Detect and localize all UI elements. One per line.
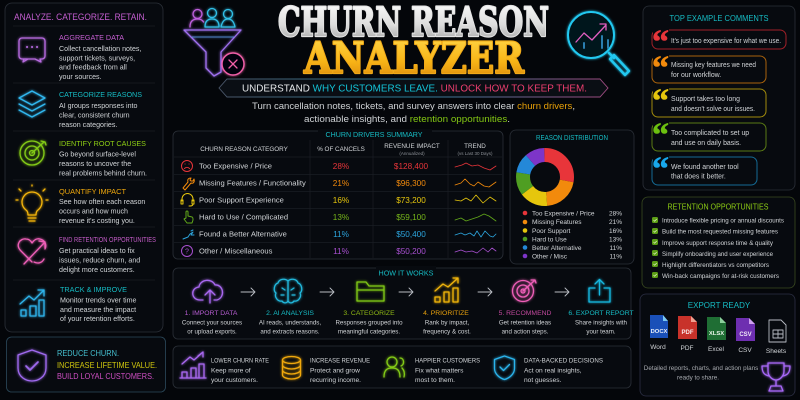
row: better alternative: [183, 230, 496, 239]
item: identify root causes: real problems behind churn.: [59, 170, 147, 178]
benefit lower churn rate: your customers.: [211, 377, 258, 384]
item: aggregate data: and feedback from all: [59, 64, 127, 72]
comment 2: “: [652, 50, 669, 87]
table header: [200, 143, 493, 156]
file icon docx: [650, 315, 668, 351]
benefit lower churn rate: [180, 352, 270, 384]
row: better alternative: Found a Better Alternative: [199, 230, 287, 238]
table header: % OF CANCELS: [317, 146, 365, 153]
comment 1: It's just too expensive for what we use.: [671, 38, 781, 45]
step 1 import data: [182, 280, 242, 336]
item: quantify impact: QUANTIFY IMPACT: [59, 187, 126, 196]
subtitle text: [252, 101, 575, 124]
row: other: ?: [185, 248, 189, 256]
file icon csv: CSV: [739, 332, 752, 338]
comment 4: “: [652, 117, 669, 154]
benefit happier customers: most to them.: [415, 377, 455, 384]
step 6 export report: Share insights with: [575, 320, 628, 326]
item: quantify impact: See how often each reason: [59, 198, 145, 206]
benefit happier customers: [384, 357, 481, 384]
benefit data-backed decisions: [494, 356, 604, 384]
row: too expensive: [182, 160, 496, 172]
step 3 categorize: 3. CATEGORIZE: [343, 310, 395, 317]
benefit increase revenue: Protect and grow: [310, 368, 360, 374]
row: poor support: 16%: [333, 196, 349, 205]
benefit increase revenue: [282, 356, 371, 384]
comment 5: [652, 151, 757, 188]
item: track and improve: TRACK & IMPROVE: [60, 285, 127, 294]
export caption: [644, 365, 758, 382]
donut legend: Hard to Use: [532, 236, 567, 243]
donut legend: 13%: [609, 236, 622, 243]
retention checklist: Build the most requested missing features: [662, 228, 779, 236]
icon: target: [20, 141, 46, 165]
item: categorize reasons: CATEGORIZE REASONS: [59, 90, 142, 99]
step 3 categorize: [335, 282, 403, 336]
donut legend: Better Alternative: [532, 245, 582, 252]
row: too expensive: Too Expensive / Price: [199, 162, 272, 170]
icon: heart with arrow: [18, 239, 46, 264]
item: quantify impact: [59, 187, 145, 225]
step 5 recommend: Get retention ideas: [499, 320, 551, 326]
donut legend: 28%: [609, 210, 622, 218]
callout text: INCREASE LIFETIME VALUE.: [57, 360, 157, 370]
file icon sheets: [766, 320, 787, 355]
comment 3: “: [652, 83, 669, 120]
benefit data-backed decisions: Act on real insights,: [524, 368, 582, 374]
panel: analyze categorize retain: [5, 3, 163, 332]
item: find retention opportunities: delight more customers.: [59, 266, 135, 274]
step 5 recommend: and action steps.: [502, 328, 549, 336]
step 1 import data: or upload exports.: [187, 328, 237, 336]
step 5 recommend: 5. RECOMMEND: [499, 310, 552, 317]
export caption: Detailed reports, charts, and action plans: [644, 365, 758, 372]
banner: UNDERSTAND WHY CUSTOMERS LEAVE. UNLOCK HOW TO KEEP THEM.: [242, 84, 587, 94]
icon: light bulb: [16, 185, 48, 221]
row: missing features: [183, 178, 496, 190]
table header: (vs Last 30 Days): [457, 151, 493, 156]
comment 1: [652, 24, 786, 61]
subtitle text: Turn cancellation notes, tickets, and survey answers into clear churn drivers ,: [252, 101, 575, 111]
step 6 export report: [568, 280, 634, 336]
row: missing features: Missing Features / Functionality: [199, 178, 306, 188]
callout text: [57, 348, 157, 381]
retention checklist: Introduce flexible pricing or annual discounts: [662, 218, 785, 224]
item: aggregate data: support tickets, surveys,: [59, 54, 135, 62]
icon: layers: [19, 91, 45, 117]
item: identify root causes: Go beyond surface-level: [59, 150, 136, 158]
title: [278, 0, 549, 84]
retention checklist: Improve support response time & quality: [662, 240, 774, 247]
comment 3: and doesn't solve our issues.: [671, 106, 755, 113]
comment 2: Missing key features we need: [671, 62, 756, 69]
comments heading: TOP EXAMPLE COMMENTS: [670, 14, 768, 23]
banner: [219, 79, 608, 97]
file icon sheets: Sheets: [766, 348, 787, 355]
row: too expensive: 28%: [333, 162, 349, 171]
file icon xlsx: [707, 317, 726, 353]
comment 3: [652, 83, 766, 120]
title: CHURN REASON: [278, 0, 549, 46]
item: categorize reasons: [59, 90, 142, 129]
benefit increase revenue: recurring income.: [310, 377, 361, 384]
benefit data-backed decisions: not guesses.: [524, 377, 562, 384]
item: track and improve: [60, 285, 137, 323]
panel: benefits bar: [173, 346, 631, 388]
distribution heading: REASON DISTRIBUTION: [536, 133, 608, 142]
item: track and improve: of your retention efforts.: [60, 315, 135, 323]
comment 2: for our workflow.: [671, 72, 721, 79]
item: track and improve: Monitor trends over time: [60, 296, 137, 304]
icon: growth chart: [20, 290, 44, 316]
step 6 export report: 6. EXPORT REPORT: [568, 310, 634, 317]
table header: CHURN REASON CATEGORY: [200, 146, 289, 153]
step 3 categorize: Responses grouped into: [335, 320, 403, 326]
comment 5: We found another tool: [671, 164, 739, 171]
step 6 export report: your team.: [586, 328, 616, 336]
row: better alternative: $50,400: [396, 230, 426, 239]
icon: shield with check: [18, 350, 46, 381]
panel: retention opportunities: [642, 197, 795, 288]
panel: churn drivers table: [173, 129, 503, 259]
panel: top example comments: [643, 6, 795, 190]
donut legend: Other / Misc: [532, 253, 568, 260]
icon: funnel with people: [184, 8, 244, 76]
step 2 ai analysis: [259, 279, 321, 336]
comment 4: and use on daily basis.: [671, 140, 741, 147]
retention checklist: [652, 217, 785, 280]
file icon xlsx: Excel: [708, 346, 724, 353]
file icon docx: Word: [650, 344, 666, 351]
item: aggregate data: Collect cancellation notes,: [59, 45, 141, 53]
step 4 prioritize: [423, 278, 471, 336]
callout text: REDUCE CHURN.: [57, 348, 119, 358]
comment 1: “: [652, 24, 669, 61]
row: poor support: Poor Support Experience: [199, 196, 284, 204]
donut legend: Too Expensive / Price: [532, 210, 595, 218]
donut legend: Poor Support: [532, 228, 570, 235]
row: poor support: [181, 194, 496, 206]
table header: TREND: [464, 143, 486, 150]
item: identify root causes: reasons to uncover the: [59, 160, 131, 168]
item: track and improve: and measure the impact: [60, 306, 136, 314]
icon: chat bubble: [19, 38, 45, 62]
item: find retention opportunities: [59, 237, 156, 274]
row: hard to use: [184, 211, 496, 223]
retention heading: RETENTION OPPORTUNITIES: [668, 202, 768, 212]
row: other: Other / Miscellaneous: [199, 246, 273, 256]
step 3 categorize: meaningful categories.: [338, 328, 400, 336]
item: categorize reasons: clear, consistent churn: [59, 112, 130, 120]
row: hard to use: $59,100: [396, 213, 426, 222]
arrows between steps: [241, 288, 569, 296]
item: categorize reasons: AI groups responses into: [59, 102, 138, 110]
comment 5: that does it better.: [671, 174, 726, 180]
row: hard to use: Hard to Use / Complicated: [199, 212, 288, 222]
item: aggregate data: AGGREGATE DATA: [59, 33, 125, 42]
file icon pdf: PDF: [682, 330, 694, 336]
benefit data-backed decisions: DATA-BACKED DECISIONS: [524, 358, 604, 364]
item: identify root causes: [59, 139, 147, 178]
file icon pdf: [678, 316, 697, 352]
subtitle text: actionable insights, and retention opportunities .: [304, 114, 510, 124]
panel: how it works: [173, 266, 634, 339]
callout text: BUILD LOYAL CUSTOMERS.: [57, 371, 154, 381]
donut chart: [523, 155, 567, 199]
title: ANALYZER: [303, 34, 524, 84]
table title: CHURN DRIVERS SUMMARY: [326, 130, 423, 139]
item: quantify impact: revenue it's costing you.: [59, 217, 135, 225]
export caption: ready to share.: [677, 374, 719, 382]
comment 4: [652, 117, 766, 154]
comment 5: “: [652, 151, 669, 188]
file icon csv: CSV: [738, 347, 752, 354]
file icon docx: DOCX: [651, 329, 668, 335]
donut legend: 16%: [609, 228, 622, 235]
item: identify root causes: IDENTIFY ROOT CAUSES: [59, 139, 146, 148]
row: better alternative: 11%: [333, 230, 349, 239]
row: other: 11%: [333, 247, 349, 256]
icon: magnifying glass with chart: [568, 12, 629, 75]
step 2 ai analysis: and extracts reasons.: [260, 328, 320, 336]
benefit happier customers: HAPPIER CUSTOMERS: [415, 358, 481, 364]
table header: (Annualized): [399, 151, 425, 156]
icon: trophy: [762, 363, 790, 391]
panel: reduce churn callout: [6, 337, 166, 392]
panel: reason distribution: [510, 130, 634, 264]
file icon xlsx: XLSX: [709, 331, 724, 337]
item: find retention opportunities: Get practical ideas to fix: [59, 247, 135, 255]
retention checklist: Win-back campaigns for at-risk customers: [662, 273, 780, 280]
step 1 import data: 1. IMPORT DATA: [185, 310, 238, 317]
donut legend: 11%: [609, 245, 622, 252]
step 4 prioritize: Rank by impact,: [425, 320, 469, 326]
item: aggregate data: your sources.: [59, 73, 102, 81]
donut legend: [523, 210, 622, 260]
step 1 import data: Connect your sources: [182, 320, 242, 326]
item: find retention opportunities: issues, reduce churn, and: [59, 256, 140, 264]
donut legend: Missing Features: [532, 219, 582, 226]
comment 4: Too complicated to set up: [671, 130, 749, 137]
step 5 recommend: [499, 280, 552, 336]
row: too expensive: $128,400: [394, 162, 429, 171]
retention checklist: Simplify onboarding and user experience: [662, 251, 773, 258]
panel heading: ANALYZE. CATEGORIZE. RETAIN.: [14, 12, 147, 23]
benefit lower churn rate: Keep more of: [211, 368, 251, 374]
row: hard to use: 13%: [333, 213, 349, 222]
how it works heading: HOW IT WORKS: [379, 268, 434, 278]
comment 2: [652, 50, 766, 87]
benefit increase revenue: INCREASE REVENUE: [310, 358, 371, 364]
file icon pdf: PDF: [680, 345, 694, 352]
row: other: $50,200: [396, 247, 426, 256]
file icon csv: [736, 318, 755, 354]
row: other: [182, 246, 496, 256]
item: aggregate data: [59, 33, 141, 81]
donut legend: 21%: [609, 219, 622, 226]
benefit happier customers: Fix what matters: [415, 368, 464, 374]
comment 3: Support takes too long: [671, 96, 740, 103]
item: find retention opportunities: FIND RETENTION OPPORTUNITIES: [59, 237, 156, 244]
donut legend: 11%: [609, 253, 622, 260]
step 2 ai analysis: 2. AI ANALYSIS: [266, 310, 314, 317]
export heading: EXPORT READY: [688, 301, 751, 310]
row: poor support: $73,200: [396, 196, 426, 205]
table header: REVENUE IMPACT: [384, 143, 440, 150]
item: quantify impact: occurs and how much: [59, 208, 128, 216]
panel: export ready: [640, 294, 795, 396]
step 4 prioritize: 4. PRIORITIZE: [423, 310, 469, 317]
step 4 prioritize: frequency & cost.: [423, 328, 471, 336]
row: missing features: 21%: [333, 179, 349, 188]
benefit lower churn rate: LOWER CHURN RATE: [211, 358, 270, 364]
item: categorize reasons: reason categories.: [59, 121, 117, 129]
step 2 ai analysis: AI reads, understands,: [259, 320, 321, 326]
row: missing features: $96,300: [396, 179, 426, 188]
retention checklist: Highlight differentiators vs competitors: [662, 262, 770, 269]
